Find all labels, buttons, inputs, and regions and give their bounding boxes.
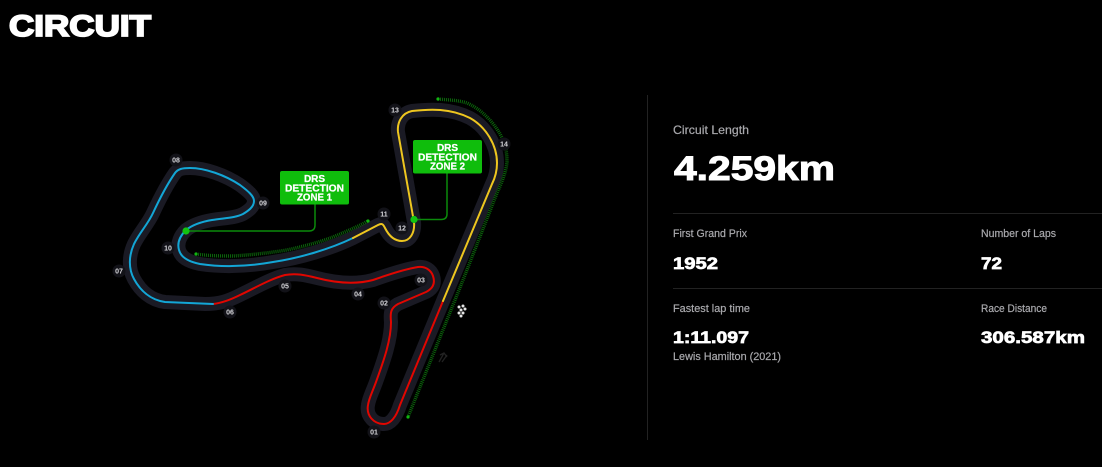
stat: fastest lap time: Fastest lap time: [673, 303, 750, 315]
DRS zone 1: [196, 221, 368, 256]
DRS callout 2: DETECTION: [418, 152, 477, 164]
turn numbers: 08: [172, 158, 180, 164]
detection point 1: [182, 227, 190, 235]
turn numbers: 13: [391, 108, 399, 114]
DRS callout 1: DETECTION: [285, 184, 344, 194]
turn numbers: 06: [226, 310, 234, 316]
stat: number of laps: [981, 228, 1056, 273]
DRS callout 2: DRS: [437, 143, 458, 154]
stat: circuit length: Circuit Length: [673, 123, 749, 137]
DRS end caps: [194, 97, 440, 419]
stat: fastest lap time: 1:11.097: [673, 328, 749, 347]
DRS callout 1: DRS: [304, 174, 325, 185]
turn numbers: 07: [115, 268, 123, 276]
turn numbers: 05: [281, 284, 289, 290]
DRS callout 1: ZONE 1: [297, 192, 332, 204]
DRS callout 2: ZONE 2: [430, 162, 465, 172]
turn numbers: 10: [164, 246, 172, 252]
title: CIRCUIT: [9, 10, 151, 43]
turn numbers: 14: [500, 142, 508, 148]
stat: first grand prix: 1952: [673, 254, 718, 273]
circuit map: [130, 97, 507, 424]
sector 2 blue: [130, 168, 353, 304]
detection point 2: [410, 216, 418, 223]
icon: direction arrow: [439, 353, 447, 362]
turn numbers: 04: [354, 292, 362, 298]
turn numbers: 11: [380, 212, 388, 218]
detection leader 1: [186, 204, 315, 231]
stat: first grand prix: First Grand Prix: [673, 228, 747, 240]
track surface outline: [130, 110, 497, 424]
stat: circuit length: 4.259km: [674, 150, 835, 188]
panel: circuit stats: [648, 95, 1102, 440]
stat: number of laps: 72: [981, 254, 1002, 273]
sector 3 yellow: [353, 110, 497, 301]
stat: race distance: 306.587km: [981, 328, 1085, 347]
stat: race distance: Race Distance: [981, 303, 1047, 315]
DRS zone 2: [408, 99, 507, 417]
stat: race distance: [981, 303, 1085, 347]
stat: circuit length: [673, 123, 835, 188]
sector 1 red: [213, 267, 443, 424]
icon: chequered flag: [458, 304, 466, 318]
DRS callout 2: [413, 140, 482, 174]
turn numbers: 12: [398, 226, 406, 232]
turn numbers: 02: [380, 300, 388, 308]
stat: fastest lap time: Lewis Hamilton (2021): [673, 351, 781, 363]
turn numbers: 03: [417, 278, 425, 284]
detection leader 2: [414, 173, 447, 220]
stat: number of laps: Number of Laps: [981, 228, 1056, 240]
stat: fastest lap time: [673, 303, 781, 363]
DRS callout 1: [280, 171, 349, 204]
turn numbers: [112, 104, 510, 438]
stat: first grand prix: [673, 228, 747, 273]
turn numbers: 09: [259, 200, 267, 208]
turn numbers: 01: [370, 430, 378, 436]
